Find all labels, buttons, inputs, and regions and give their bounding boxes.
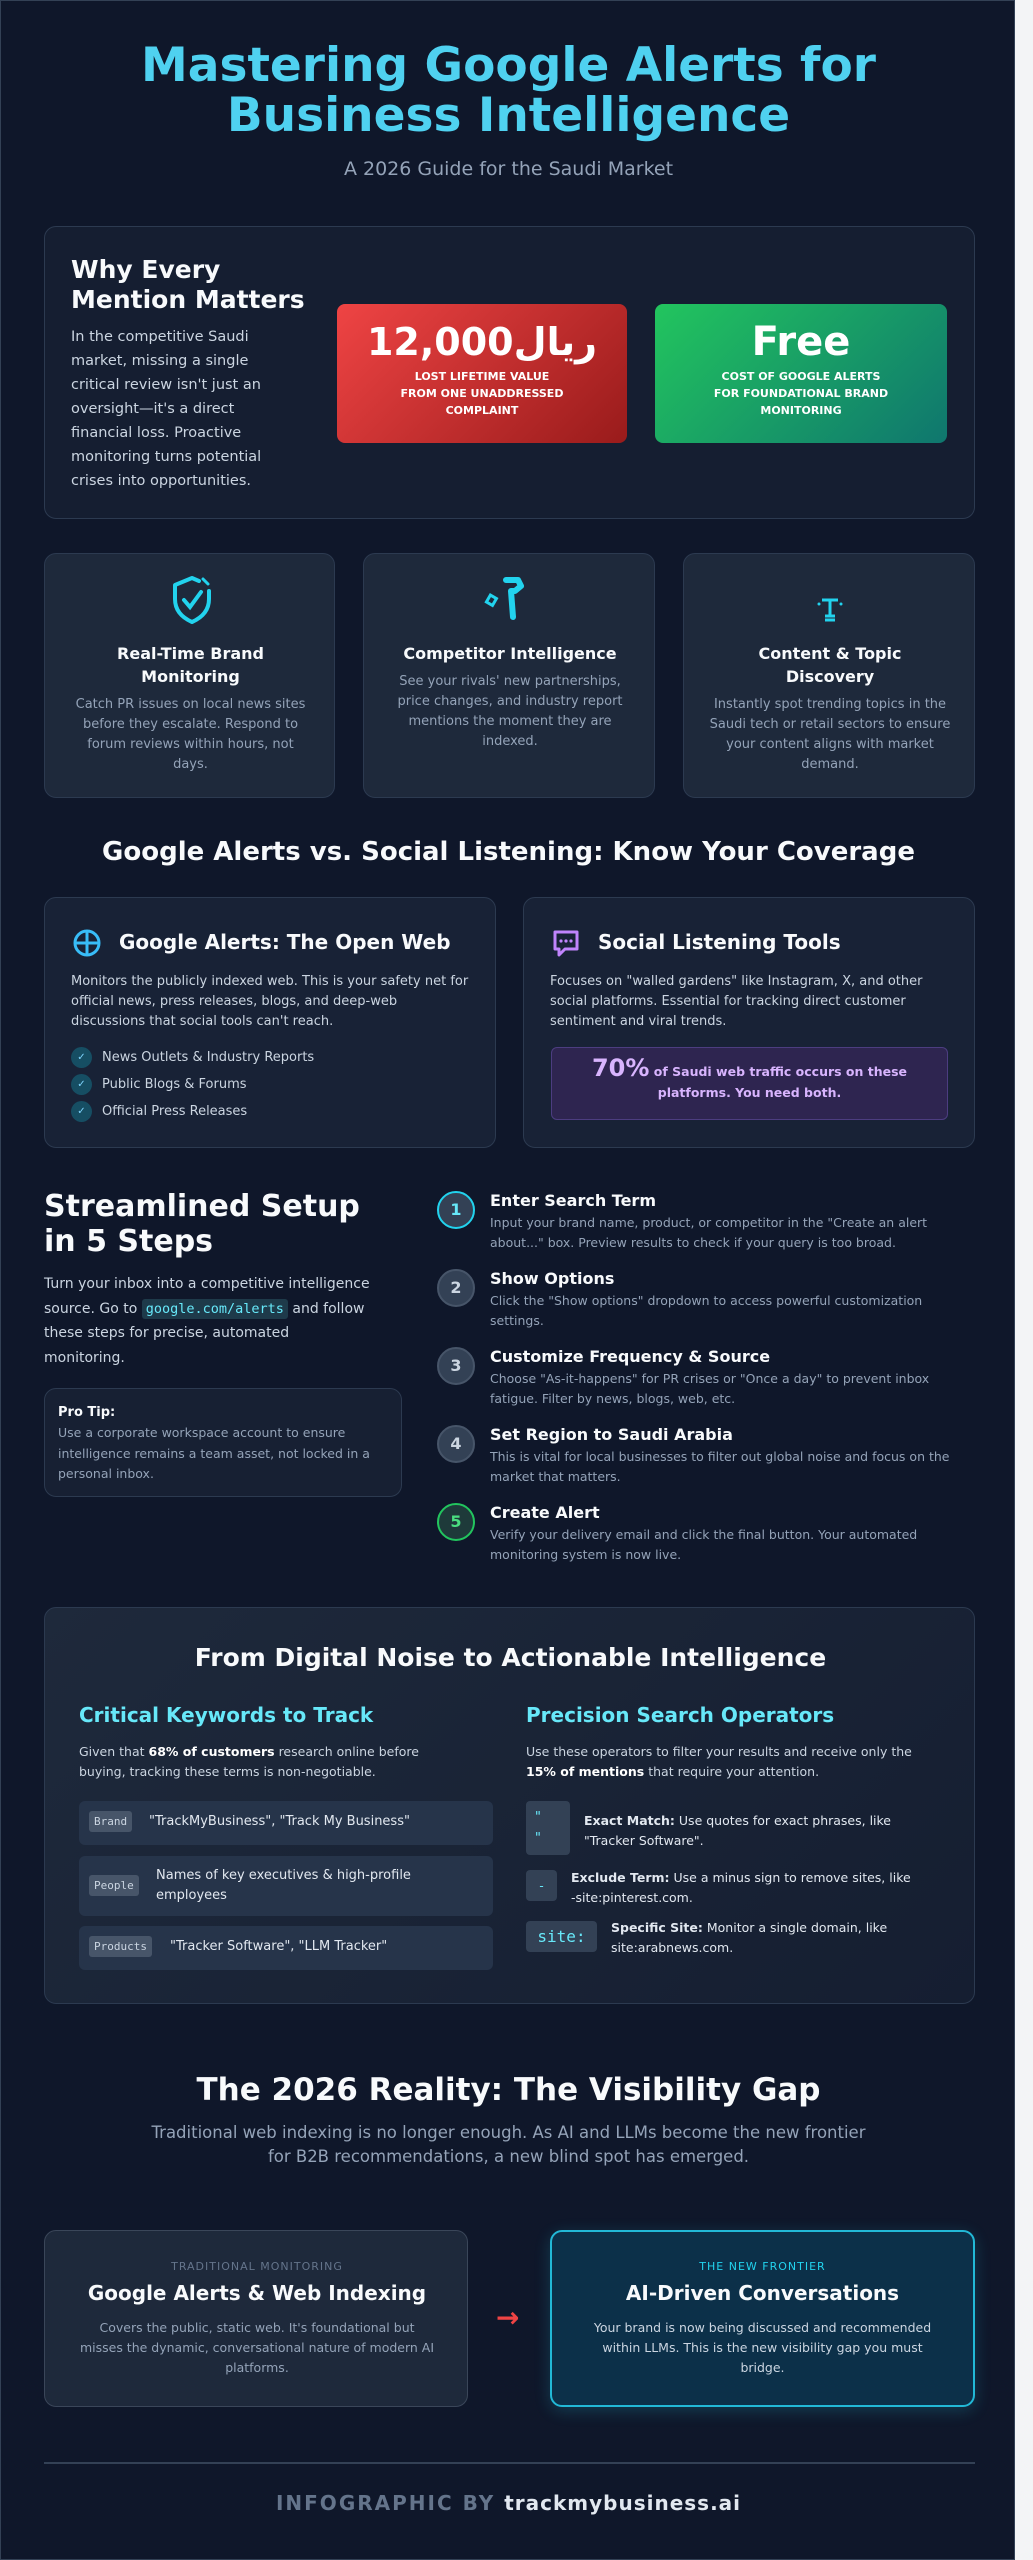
stat: 12000 riyal: COMPLAINT (446, 404, 518, 417)
operator list: Exact Match: Use quotes for exact phrases, like "Tracker Software". (584, 1813, 891, 1848)
stat callout: 70%: platforms. You need both. (658, 1085, 841, 1100)
subtitle: A 2026 Guide for the Saudi Market (344, 158, 673, 180)
card: traditional monitoring: Google Alerts & Web Indexing (88, 2281, 426, 2305)
step 4: Set Region to Saudi Arabia (490, 1425, 733, 1444)
visibility subtext (151, 2123, 866, 2166)
step 1: 1 (450, 1200, 462, 1219)
title: Competitor Intelligence (403, 644, 617, 663)
step 5: Verify your delivery email and click the final button. Your automated monitoring system is now live. (490, 1527, 917, 1562)
checklist: ✓ (77, 1106, 86, 1117)
step 4 (437, 1425, 949, 1484)
pro tip box: Pro Tip: (58, 1405, 115, 1420)
panel: why every mention matters (44, 226, 975, 519)
keyword list: People (94, 1879, 134, 1892)
subhead: keywords: Critical Keywords to Track (79, 1703, 373, 1727)
visibility subtext: for B2B recommendations, a new blind spot has emerged. (268, 2147, 749, 2166)
operator list: - (538, 1878, 545, 1893)
stat: free: FOR FOUNDATIONAL BRAND (714, 387, 888, 400)
step 2: Show Options (490, 1269, 614, 1288)
pro tip box (44, 1388, 402, 1497)
operator list: " (534, 1831, 542, 1846)
title: Monitoring (141, 667, 240, 686)
heading: Mention Matters (71, 285, 305, 314)
panel: digital noise to intelligence (44, 1607, 975, 2004)
desc: Focuses on "walled gardens" like Instagram, X, and other social platforms. Essential for tracking direct customer sentiment and viral trends. (550, 974, 922, 1029)
heading: Social Listening Tools (598, 930, 841, 954)
arrow: → (496, 2301, 519, 2334)
keyword list: Products (94, 1940, 147, 1953)
keyword list (79, 1801, 493, 1970)
visibility subtext: Traditional web indexing is no longer enough. As AI and LLMs become the new frontier (152, 2123, 866, 2142)
steps list (437, 1191, 949, 1562)
stat: 12000 riyal (337, 304, 627, 443)
title: Mastering Google Alerts for (141, 38, 876, 93)
checklist: Public Blogs & Forums (102, 1077, 247, 1092)
card: AI-driven conversations: AI-Driven Conversations (626, 2281, 899, 2305)
title (759, 644, 901, 686)
step 3 (437, 1347, 929, 1406)
operator list: Exclude Term: Use a minus sign to remove sites, like (571, 1870, 911, 1885)
icon: competitor (484, 577, 524, 620)
step 1 (437, 1191, 927, 1250)
intro text: Turn your inbox into a competitive intelligence source. Go to google.com/alerts and follow these steps for precise, automated monitoring. (44, 1276, 370, 1366)
desc: Catch PR issues on local news sites before they escalate. Respond to forum reviews within hours, not days. (76, 697, 305, 772)
step 5: 5 (450, 1512, 462, 1531)
title: Discovery (786, 667, 874, 686)
icon: shield check (173, 576, 211, 624)
step 3: 3 (450, 1356, 462, 1375)
card: AI-driven conversations: Your brand is now being discussed and recommended within LLMs. This is the new visibility gap you must bridge. (594, 2320, 931, 2375)
stat: 12000 riyal: 12,000‪ريال‬ (367, 320, 597, 364)
step 1: Enter Search Term (490, 1191, 656, 1210)
desc: Instantly spot trending topics in the Saudi tech or retail sectors to ensure your content aligns with market demand. (710, 697, 950, 772)
stat: 12000 riyal: LOST LIFETIME VALUE (415, 370, 549, 383)
checklist: Official Press Releases (102, 1104, 247, 1119)
step 2: 2 (450, 1278, 462, 1297)
heading: Why Every (71, 255, 220, 284)
heading (71, 255, 305, 314)
checklist: ✓ (77, 1079, 86, 1090)
section heading: coverage: Google Alerts vs. Social Listening: Know Your Coverage (102, 837, 915, 867)
operator list (526, 1801, 911, 1955)
stat callout: 70% (551, 1047, 948, 1120)
operator list: site: (537, 1927, 586, 1946)
step 4: This is vital for local businesses to filter out global noise and focus on the market that matters. (490, 1449, 949, 1484)
card: traditional monitoring (44, 2230, 468, 2407)
step 3: Customize Frequency & Source (490, 1347, 770, 1366)
step 1: Input your brand name, product, or competitor in the "Create an alert about..." box. Preview results to check if your query is too broad. (490, 1215, 927, 1250)
stat: free: MONITORING (760, 404, 842, 417)
operator list: -site:pinterest.com. (571, 1890, 693, 1905)
icon: chat (554, 930, 578, 957)
pro tip box: Use a corporate workspace account to ensure intelligence remains a team asset, not locked in a personal inbox. (58, 1425, 370, 1481)
stat callout: 70%: 70% of Saudi web traffic occurs on these (592, 1054, 907, 1082)
panel: social listening (523, 897, 975, 1148)
title: Content & Topic (759, 644, 901, 663)
footer: INFOGRAPHIC BY trackmybusiness.ai (276, 2491, 741, 2515)
desc: Monitors the publicly indexed web. This is your safety net for official news, press releases, blogs, and deep-web discussions that social tools can't reach. (71, 974, 468, 1029)
card: AI-driven conversations (550, 2230, 975, 2407)
keyword list: "Tracker Software", "LLM Tracker" (170, 1939, 387, 1954)
icon: globe (74, 930, 100, 956)
step 2: Click the "Show options" dropdown to access powerful customization settings. (490, 1293, 922, 1328)
checklist: ✓ (77, 1052, 86, 1063)
feature card: brand monitoring (44, 553, 335, 798)
checklist: News Outlets & Industry Reports (102, 1050, 314, 1065)
heading: streamlined setup: Streamlined Setup (44, 1189, 360, 1224)
step 5: Create Alert (490, 1503, 600, 1522)
keyword list: "TrackMyBusiness", "Track My Business" (149, 1814, 410, 1829)
heading: Google Alerts: The Open Web (119, 930, 451, 954)
stat: free: COST OF GOOGLE ALERTS (722, 370, 880, 383)
title (117, 644, 264, 686)
step 4: 4 (450, 1434, 462, 1453)
operator list: " (534, 1810, 542, 1825)
subhead: operators: Precision Search Operators (526, 1703, 834, 1727)
heading: streamlined setup (44, 1189, 360, 1259)
heading: visibility gap: The 2026 Reality: The Visibility Gap (196, 2072, 820, 2108)
feature card: competitor (363, 553, 655, 798)
operators para: Use these operators to filter your results and receive only the 15% of mentions that require your attention. (526, 1744, 912, 1779)
title: Real-Time Brand (117, 644, 264, 663)
body text: In the competitive Saudi market, missing a single critical review isn't just an oversight—it's a direct financial loss. Proactive monitoring turns potential crises into opportunities. (71, 329, 261, 489)
title (141, 38, 876, 143)
card: AI-driven conversations: THE NEW FRONTIER (699, 2260, 826, 2273)
keyword list: Names of key executives & high-profile employees (156, 1868, 411, 1903)
icon: topic (818, 598, 842, 622)
checklist (71, 1047, 314, 1122)
step 3: Choose "As-it-happens" for PR crises or "Once a day" to prevent inbox fatigue. Filter by news, blogs, web, etc. (490, 1371, 929, 1406)
keywords para: Given that 68% of customers research online before buying, tracking these terms is non-negotiable. (79, 1744, 419, 1779)
step 2 (437, 1269, 922, 1328)
keyword list: Brand (94, 1815, 127, 1828)
desc: See your rivals' new partnerships, price changes, and industry report mentions the moment they are indexed. (397, 674, 623, 749)
operator list: Specific Site: Monitor a single domain, like site:arabnews.com. (611, 1920, 887, 1955)
stat: free (655, 304, 947, 443)
heading: streamlined setup: in 5 Steps (44, 1224, 213, 1259)
title: Business Intelligence (227, 88, 790, 143)
panel: google alerts open web (44, 897, 496, 1148)
card: traditional monitoring: Covers the public, static web. It's foundational but misses the dynamic, conversational nature of modern AI platforms. (80, 2320, 434, 2375)
feature card: content discovery (683, 553, 975, 798)
panel heading: From Digital Noise to Actionable Intelligence (195, 1643, 826, 1672)
stat: free: Free (752, 319, 850, 365)
card: traditional monitoring: TRADITIONAL MONITORING (171, 2260, 343, 2273)
stat: 12000 riyal: FROM ONE UNADDRESSED (401, 387, 563, 400)
step 5 (437, 1503, 917, 1562)
